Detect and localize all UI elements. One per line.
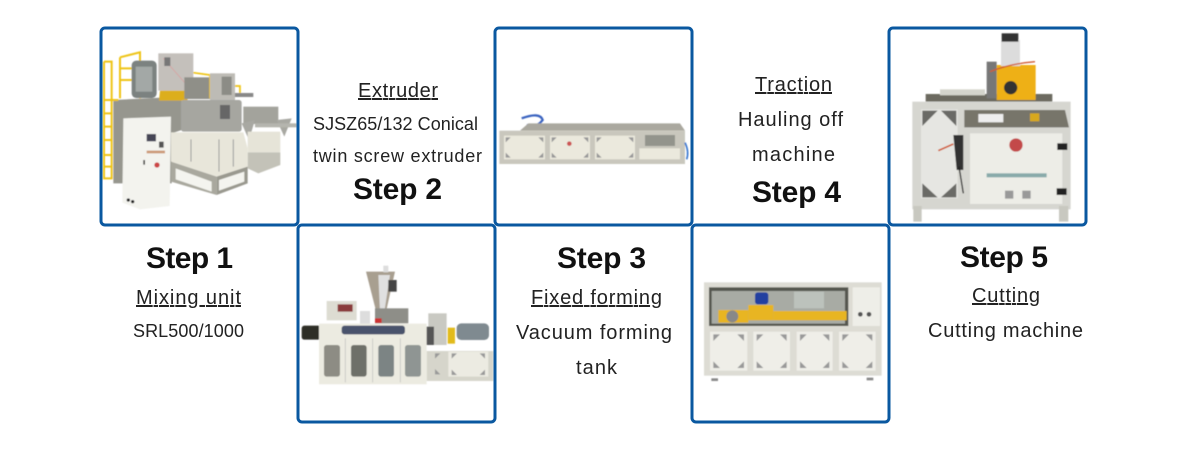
text block: step 2: SJSZ65/132 Conical xyxy=(313,114,478,134)
frame: step 3 xyxy=(495,28,692,225)
text block: step 5: Cutting machine xyxy=(928,320,1083,342)
machine photo: hauling off machine xyxy=(704,282,882,381)
text block: step 3: Step 3 xyxy=(557,242,646,275)
text block: step 5: Step 5 xyxy=(960,241,1048,274)
text block: step 3: Vacuum forming xyxy=(516,322,672,344)
frame: step 1 xyxy=(101,28,298,225)
text block: step 1: SRL500/1000 xyxy=(133,321,244,341)
machine photo: cutting machine xyxy=(912,33,1071,222)
text block: step 3: tank xyxy=(576,357,618,379)
text block: step 1: Mixing unit xyxy=(136,287,241,309)
text block: step 2: Extruder xyxy=(358,80,438,102)
text block: step 4: Traction xyxy=(755,74,832,96)
frame: step 4 xyxy=(692,225,889,422)
text block: step 3 xyxy=(516,242,672,379)
text block: step 4: machine xyxy=(752,144,835,166)
text block: step 2: Step 2 xyxy=(353,173,442,206)
machine photo: conical twin screw extruder xyxy=(302,266,493,384)
text block: step 2 xyxy=(313,80,482,206)
text block: step 4: Hauling off xyxy=(738,109,843,131)
text block: step 4: Step 4 xyxy=(752,176,841,209)
text block: step 5 xyxy=(928,241,1083,342)
text block: step 3: Fixed forming xyxy=(531,287,662,309)
text block: step 1: Step 1 xyxy=(146,242,233,275)
text block: step 2: twin screw extruder xyxy=(313,146,482,166)
machine photo: mixing unit xyxy=(104,52,297,209)
frame: step 5 xyxy=(889,28,1086,225)
frame: step 2 xyxy=(298,225,495,422)
machine photo: vacuum forming tank xyxy=(499,115,688,164)
text block: step 5: Cutting xyxy=(972,285,1040,307)
text block: step 1 xyxy=(133,242,244,341)
text block: step 4 xyxy=(738,74,843,209)
